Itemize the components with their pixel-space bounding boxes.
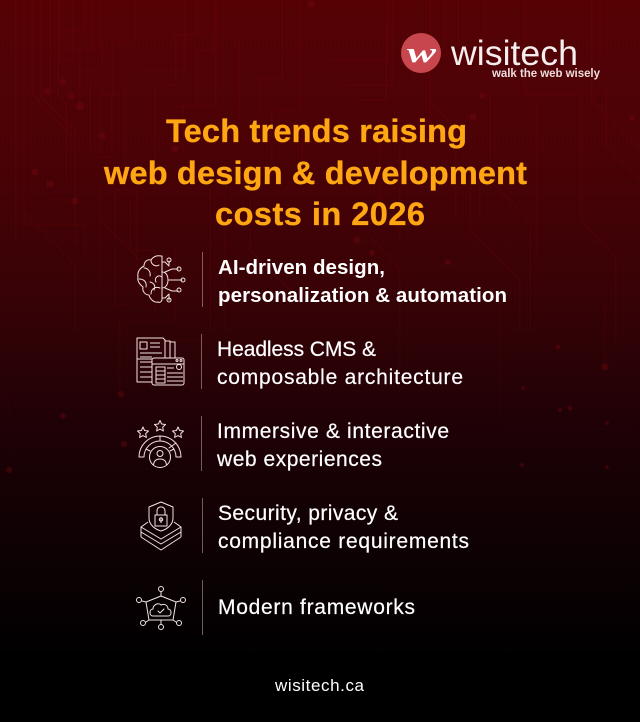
item text: compliance requirements xyxy=(218,530,469,553)
logo tagline: walk the web wisely xyxy=(491,68,601,80)
item text: composable architecture xyxy=(217,366,463,389)
icon: AI brain xyxy=(138,256,185,302)
divider xyxy=(201,334,202,389)
item text: Immersive & interactive xyxy=(217,420,449,443)
item: Immersive experiences xyxy=(138,416,449,471)
item text xyxy=(216,420,449,471)
icon: documents and browser window xyxy=(137,338,184,385)
title: web design & development xyxy=(103,155,527,191)
logo wordmark: wisitech xyxy=(450,34,578,73)
item text xyxy=(218,502,469,553)
item text xyxy=(218,256,507,307)
item text: personalization & automation xyxy=(218,284,507,307)
icon: stars and gauge with user xyxy=(138,420,184,468)
logo w mark: w xyxy=(407,37,437,69)
title: costs in 2026 xyxy=(215,196,425,232)
item text: AI-driven design, xyxy=(218,256,385,279)
background circuit traces xyxy=(0,0,640,417)
item text: web experiences xyxy=(216,448,382,471)
item text: Modern frameworks xyxy=(218,596,415,619)
divider xyxy=(201,416,202,471)
logo badge xyxy=(401,33,441,73)
divider xyxy=(202,580,203,635)
icon: cloud network pentagon xyxy=(136,586,186,630)
item text: Headless CMS & xyxy=(217,338,376,361)
background circuit nodes xyxy=(6,0,635,473)
title: Tech trends raising xyxy=(166,113,467,149)
footer url: wisitech.ca xyxy=(274,676,365,695)
item text xyxy=(217,338,463,389)
divider xyxy=(202,252,203,307)
divider xyxy=(202,498,203,553)
item: AI-driven design xyxy=(138,252,507,307)
item: Modern frameworks xyxy=(136,580,415,635)
item: Headless CMS xyxy=(137,334,463,389)
logo xyxy=(401,33,601,80)
item: Security xyxy=(141,498,469,553)
icon: shield lock on layers xyxy=(141,502,181,550)
item text: Security, privacy & xyxy=(218,502,398,525)
title xyxy=(103,113,527,232)
